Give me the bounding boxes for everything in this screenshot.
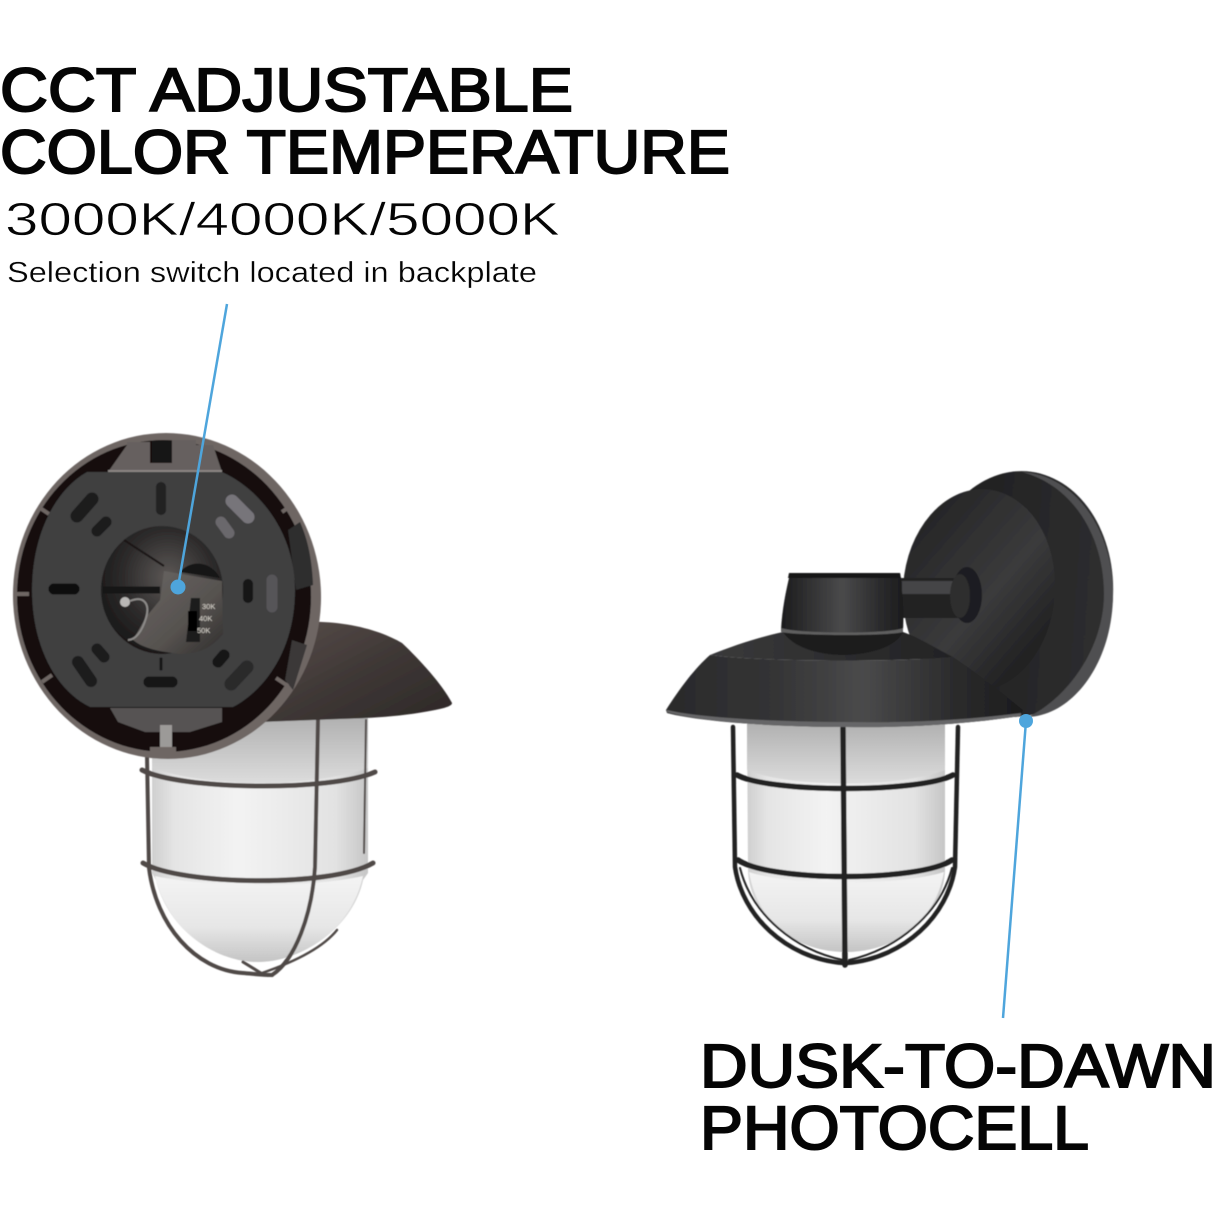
centre opening xyxy=(101,526,223,654)
switch plate xyxy=(133,571,223,654)
glass globe xyxy=(747,722,945,952)
title: CCT adjustable color temperature: COLOR TEMPERATURE xyxy=(0,118,730,186)
bottom mounting bracket xyxy=(110,708,222,732)
selector switch: 40K xyxy=(199,614,212,623)
title: CCT adjustable color temperature: CCT ADJUSTABLE xyxy=(0,56,573,124)
callout line: photocell xyxy=(1003,714,1033,1018)
selector switch: 30K xyxy=(202,602,215,611)
lamp shade xyxy=(260,622,452,722)
backplate rim xyxy=(5,425,329,767)
product: lamp rear view with backplate xyxy=(5,425,452,975)
selector switch: 50K xyxy=(197,626,210,635)
glass globe xyxy=(152,716,368,962)
backplate disc xyxy=(915,465,1121,723)
heading: dusk-to-dawn photocell xyxy=(700,1032,1216,1162)
support arm xyxy=(898,567,982,623)
plate slots xyxy=(54,487,272,684)
mounting plate xyxy=(32,472,295,707)
selector switch xyxy=(186,598,215,642)
photocell cap xyxy=(781,573,903,634)
heading: dusk-to-dawn photocell: PHOTOCELL xyxy=(700,1094,1089,1162)
title: CCT adjustable color temperature xyxy=(0,56,730,186)
caption: selection switch location: Selection switch located in backplate xyxy=(7,257,537,289)
glossy interior highlights xyxy=(288,522,313,590)
heading: dusk-to-dawn photocell: DUSK-TO-DAWN xyxy=(700,1032,1216,1100)
top mounting bracket xyxy=(108,440,222,472)
subtitle: color temperature values: 3000K/4000K/5000K xyxy=(5,193,560,245)
callout line: CCT switch xyxy=(170,304,227,594)
backplate interior xyxy=(9,433,319,759)
rim ribs xyxy=(13,505,292,686)
inner disc xyxy=(896,484,1062,696)
lamp shade xyxy=(666,632,1023,727)
wire cage xyxy=(733,727,958,965)
product: lamp side view xyxy=(666,465,1121,965)
wire and screw xyxy=(120,597,147,640)
wire cage xyxy=(142,720,375,975)
